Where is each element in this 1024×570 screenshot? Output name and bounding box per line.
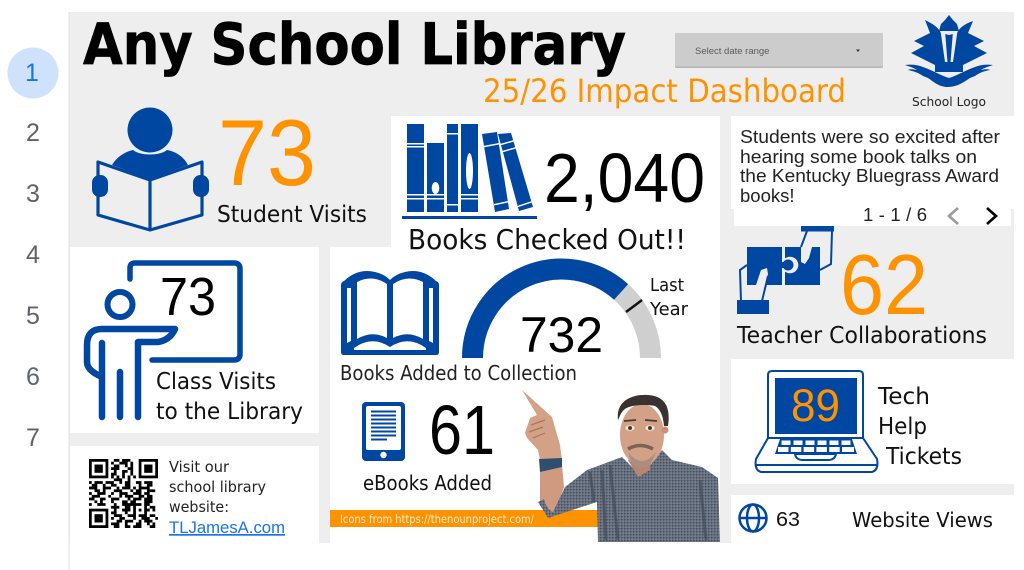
date range dropdown [675,33,883,68]
note text [740,126,1000,206]
icon: ereader [362,402,405,461]
page navigation: 6 [26,363,40,391]
note text: Students were so excited after [740,126,1000,147]
note pagination [863,204,996,225]
photo: man pointing [522,390,720,542]
ebooks number: 61 [429,391,495,469]
tech tickets label: Tech [877,384,930,410]
note text: the Kentucky Bluegrass Award [740,165,999,186]
ebooks label: eBooks Added [363,471,492,495]
page navigation: 2 [26,119,40,147]
tech tickets label [877,384,962,470]
panel: books checked out [391,116,720,256]
panel: website views [731,495,1014,543]
website text: Visit our [169,458,230,476]
school logo [905,15,993,109]
teacher collaborations number: 62 [840,238,928,333]
student visits label: Student Visits [217,202,367,228]
website views label: Website Views [852,508,993,532]
icon: open book [341,271,439,355]
note pagination: 1 - 1 / 6 [863,204,927,225]
books added label: Books Added to Collection [340,361,577,385]
QR code [89,460,158,527]
tech tickets number: 89 [791,380,840,431]
books checked out number: 2,040 [544,139,705,217]
page navigation: 3 [26,180,40,208]
note text: hearing some book talks on [740,146,977,167]
panel: collection and ebooks [330,247,720,543]
website text: website: [169,498,229,516]
icon credit banner: Icons from https://thenounproject.com/ [340,512,534,526]
note text: books! [740,185,795,206]
books checked out label: Books Checked Out!! [408,223,686,256]
gauge chart [472,269,650,358]
tech tickets label: Help [878,414,927,440]
icon: laptop [755,371,878,472]
class visits label [156,369,303,425]
page navigation: 5 [26,302,40,330]
page navigation [8,48,58,452]
icon: student reading [92,108,209,230]
gauge value: 732 [520,307,603,363]
website text [169,458,266,516]
panel: student visits [92,100,367,230]
gauge target label [649,275,689,320]
gauge target label: Year [649,299,689,320]
school logo: School Logo [912,95,986,109]
class visits label: to the Library [156,399,303,425]
gauge target label: Last [650,275,684,296]
date range dropdown: Select date range [695,46,769,57]
subtitle: 25/26 Impact Dashboard [483,72,846,110]
page navigation: 1 [25,59,39,87]
page navigation: 7 [26,424,40,452]
tech tickets label: Tickets [885,444,962,470]
website link: TLJamesA.com [169,518,285,537]
icon: globe [740,504,766,532]
panel: website QR [70,446,319,543]
student visits number: 73 [218,100,316,205]
page navigation: 4 [26,241,40,269]
panel: student note [731,116,1014,226]
website text: school library [169,478,266,496]
class visits label: Class Visits [156,369,276,395]
icon: teacher at board [87,263,240,417]
icon credit banner [330,510,708,527]
panel: tech help tickets [731,359,1014,484]
panel: class visits [70,247,319,433]
icon: books on shelf [402,124,537,219]
panel: teacher collaborations [736,226,987,349]
teacher collaborations label: Teacher Collaborations [736,323,987,349]
class visits number: 73 [160,267,216,327]
title: Any School Library [83,12,626,78]
website views number: 63 [776,509,800,531]
icon: hands with puzzle pieces [737,226,834,314]
